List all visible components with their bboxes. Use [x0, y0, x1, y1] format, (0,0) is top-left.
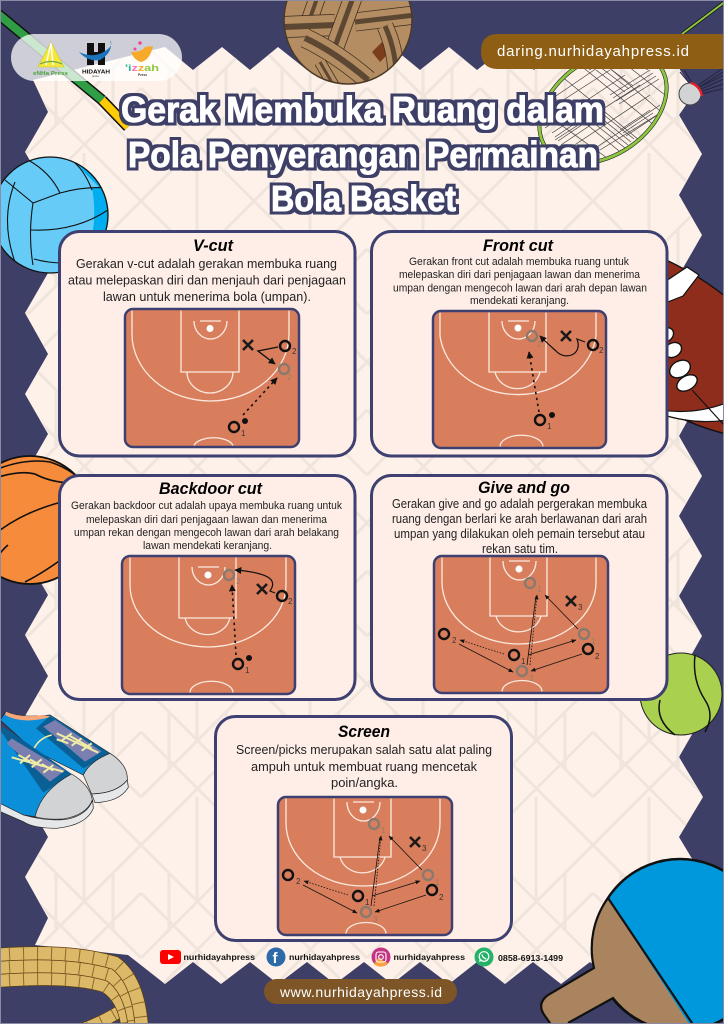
diagram: Backdoor cut court: 2: [236, 577, 241, 586]
text: Backdoor cut description: umpan rekan dengan mengecoh lawan dari arah belakang: [74, 527, 339, 539]
icon: Facebook: f: [272, 950, 278, 967]
diagram: Screen court: 2: [296, 877, 301, 886]
text: YouTube handle: nurhidayahpress: [184, 952, 255, 962]
text: Screen description: ampuh untuk membuat ruang mencetak: [251, 760, 478, 774]
text: Give and go description: ruang dengan berlari ke arah berlawanan dari arah: [392, 512, 647, 526]
text: Screen description: poin/angka.: [331, 776, 398, 790]
title: Gerak Membuka Ruang dalam: [121, 89, 604, 130]
icon: YouTube: [160, 950, 181, 964]
logo: Izzah Press: [125, 41, 159, 77]
text: Backdoor cut description: melepaskan diri dari penjagaan lawan dan menerima: [86, 514, 328, 526]
diagram: Give and go court: 3: [578, 603, 583, 612]
diagram: Screen court: 1: [381, 826, 386, 835]
logo: eNHa Press: [33, 42, 68, 77]
icon: blue sneakers: [0, 712, 128, 828]
icon: volleyball: [0, 157, 110, 273]
text: Screen description: [236, 743, 492, 790]
title: [121, 89, 604, 219]
text: WhatsApp number: 0858-6913-1499: [498, 953, 563, 963]
diagram: Give and go court: 1: [537, 585, 542, 594]
panel: Screen: [216, 716, 512, 940]
diagram: V-cut court: [125, 309, 299, 447]
text: Front cut description: [393, 256, 647, 307]
icon: coiled rope: [0, 953, 142, 1024]
text: Facebook handle: nurhidayahpress: [289, 952, 360, 962]
diagram: Give and go court: 2: [595, 652, 600, 661]
diagram: Backdoor cut court: 2: [288, 597, 293, 606]
icon: Instagram: [372, 948, 390, 967]
diagram: Screen court: 2: [439, 893, 444, 902]
icon: badminton racket: [1, 1, 723, 165]
diagram: Backdoor cut court: 1: [245, 666, 250, 675]
text: Backdoor cut description: Gerakan backdoor cut adalah upaya membuka ruang untuk: [71, 500, 342, 512]
text: Give and go description: umpan yang dilakukan oleh pemain tersebut atau: [394, 527, 645, 541]
icon: sepak takraw ball: [283, 0, 415, 88]
text: V-cut description: atau melepaskan diri dan menjauh dari penjagaan: [68, 274, 346, 288]
diagram: Give and go court: 2: [452, 636, 457, 645]
text: Give and go description: [392, 497, 647, 556]
panel: V-cut: [60, 232, 355, 456]
icon: basketball: [1, 455, 76, 585]
diagram: Screen court: 1: [435, 878, 440, 887]
diagram: Backdoor cut court: [122, 556, 295, 694]
title: Pola Penyerangan Permainan: [128, 134, 598, 175]
diagram: Front cut court: 2: [537, 340, 542, 349]
text: V-cut description: lawan untuk menerima bola (umpan).: [103, 290, 311, 304]
diagram: V-cut court: 2: [287, 373, 292, 382]
diagram: Screen court: [278, 797, 452, 935]
diagram: Screen court: 3: [422, 844, 427, 853]
bottom url pill: [264, 979, 457, 1004]
text: Give and go description: rekan satu tim.: [482, 542, 558, 556]
logo: eNHa Press: eNHa Press: [33, 71, 68, 77]
icon: table tennis paddle: [541, 859, 724, 1024]
title: Bola Basket: [271, 178, 456, 219]
diagram: Give and go court: 3: [529, 674, 534, 683]
icon: shuttlecock: [679, 66, 724, 105]
icon: american football: [654, 255, 724, 434]
text: V-cut description: Gerakan v-cut adalah gerakan membuka ruang: [76, 257, 337, 271]
text: Front cut description: Gerakan front cut adalah membuka ruang untuk: [409, 256, 629, 268]
logo pill: [11, 34, 182, 81]
diagram: Front cut court: 1: [547, 422, 552, 431]
text: Backdoor cut description: [71, 500, 342, 552]
text: Front cut description: mendekati keranjang.: [470, 295, 569, 307]
diagram: Front cut court: [433, 311, 606, 448]
top url pill: [481, 34, 724, 69]
logo: Izzah Press: 'izzah: [125, 63, 159, 73]
text: Front cut description: melepaskan diri dari penjagaan lawan dan menerima: [399, 269, 641, 281]
logo: Izzah Press: Press: [138, 73, 147, 77]
icon: WhatsApp: [474, 948, 494, 966]
heading: V-cut: V-cut: [193, 236, 234, 255]
bottom url pill: www.nurhidayahpress.id: [279, 984, 442, 1000]
top url pill: daring.nurhidayahpress.id: [497, 43, 689, 60]
text: Front cut description: umpan dengan mengecoh lawan dari arah depan lawan: [393, 282, 647, 294]
text: Give and go description: Gerakan give and go adalah pergerakan membuka: [392, 497, 647, 511]
text: Screen description: Screen/picks merupakan salah satu alat paling: [236, 743, 492, 757]
icon: tennis ball: [640, 653, 722, 735]
diagram: V-cut court: 2: [292, 347, 297, 356]
logo: Hidayah Press: press: [92, 74, 99, 78]
diagram: V-cut court: 1: [241, 429, 246, 438]
diagram: Give and go court: 1: [521, 657, 526, 666]
icon: Facebook: [266, 948, 286, 967]
heading: Front cut: Front cut: [483, 236, 554, 255]
text: Backdoor cut description: lawan mendekati keranjang.: [143, 540, 272, 552]
logo: Hidayah Press: [79, 40, 111, 78]
panel: Backdoor cut: [60, 476, 355, 700]
social media row: [160, 948, 563, 967]
heading: Screen: Screen: [338, 722, 390, 741]
panel: Front cut: [372, 232, 667, 456]
diagram: Front cut court: 2: [599, 346, 604, 355]
diagram: Give and go court: 1: [591, 637, 596, 646]
diagram: Give and go court: [434, 556, 608, 693]
text: Instagram handle: nurhidayahpress: [394, 952, 465, 962]
logo: Hidayah Press: HIDAYAH: [82, 70, 110, 76]
diagram: Screen court: 3: [373, 915, 378, 924]
panel: Give and go: [372, 476, 667, 700]
text: V-cut description: [68, 257, 346, 304]
heading: Backdoor cut: Backdoor cut: [159, 479, 263, 498]
diagram: Screen court: 1: [365, 898, 370, 907]
heading: Give and go: Give and go: [478, 478, 570, 497]
